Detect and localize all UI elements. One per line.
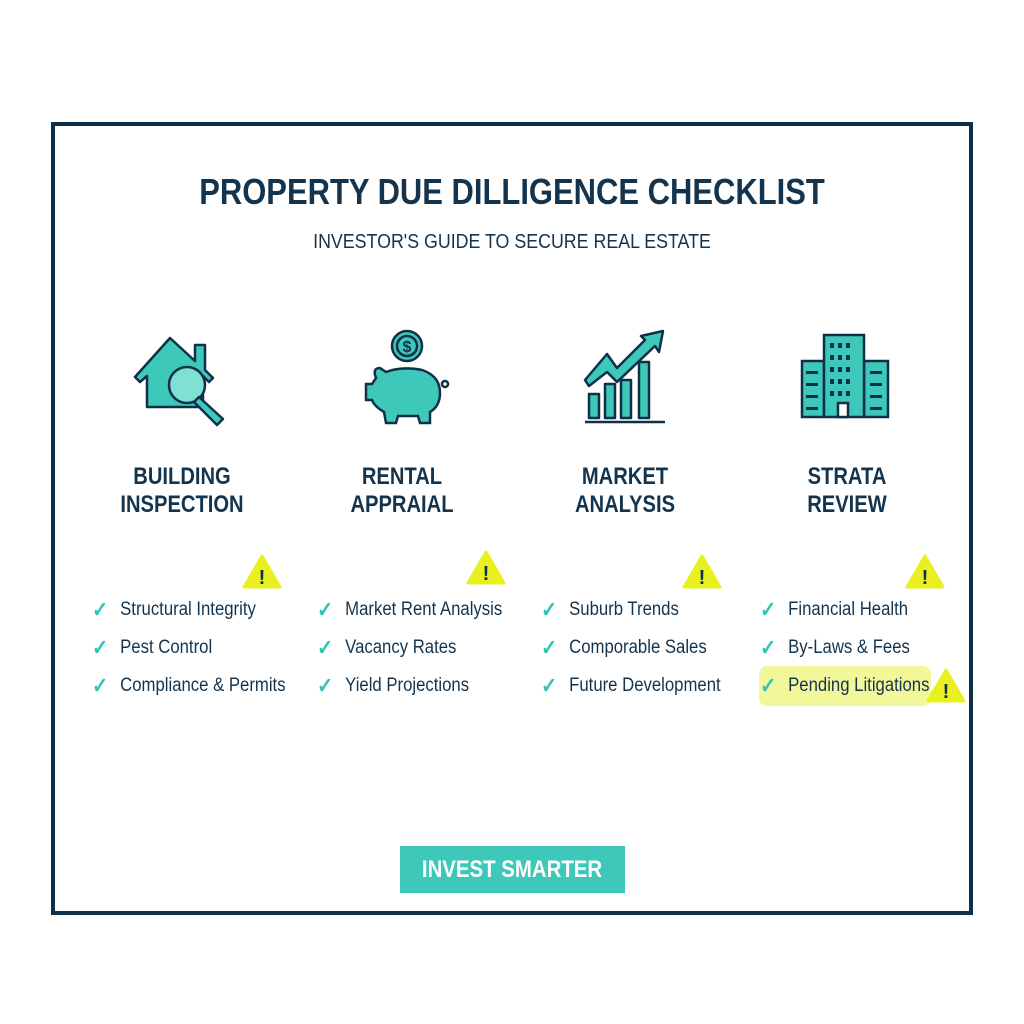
list: strata review: By-Laws & Fees — [788, 637, 910, 658]
list: rental appraisal — [320, 599, 502, 696]
button — [400, 846, 625, 893]
list: strata review — [762, 599, 929, 696]
heading: building inspection — [120, 463, 244, 518]
heading: strata review — [807, 463, 887, 518]
heading: rental appraisal — [350, 463, 454, 518]
list: rental appraisal: Vacancy Rates — [345, 637, 456, 658]
list: market analysis: Future Development — [569, 675, 721, 696]
heading: strata review: STRATA — [808, 463, 886, 490]
warning icons: ! — [699, 567, 705, 589]
list: rental appraisal: Yield Projections — [345, 675, 469, 696]
title: PROPERTY DUE DILLIGENCE CHECKLIST — [199, 171, 825, 212]
heading: building inspection: INSPECTION — [120, 491, 244, 518]
subtitle: INVESTOR'S GUIDE TO SECURE REAL ESTATE — [313, 231, 711, 253]
heading: rental appraisal: RENTAL — [362, 463, 442, 490]
list: market analysis — [544, 599, 721, 696]
button: INVEST SMARTER — [422, 856, 603, 883]
icon: building — [800, 334, 890, 418]
icon: growth chart — [584, 330, 665, 424]
heading: building inspection: BUILDING — [133, 463, 231, 490]
icon: piggy bank: $ — [403, 339, 412, 356]
list: rental appraisal: Market Rent Analysis — [345, 599, 502, 620]
list: strata review: Financial Health — [788, 599, 908, 620]
heading: market analysis — [575, 463, 675, 518]
list: strata review: Pending Litigations — [788, 675, 929, 696]
heading: market analysis: MARKET — [582, 463, 668, 490]
list: market analysis: Comporable Sales — [569, 637, 707, 658]
icon: house with magnifier — [134, 336, 224, 426]
list: building inspection — [94, 599, 286, 696]
frame — [51, 122, 973, 915]
highlight: pending litigations — [759, 666, 931, 706]
icon: piggy bank — [364, 330, 450, 424]
list: building inspection: Compliance & Permits — [120, 675, 286, 696]
heading: strata review: REVIEW — [807, 491, 887, 518]
warning icons: ! — [483, 563, 489, 585]
warning icons: ! — [943, 681, 949, 703]
heading: rental appraisal: APPRAIAL — [350, 491, 454, 518]
heading: market analysis: ANALYSIS — [575, 491, 675, 518]
warning icons: ! — [922, 567, 928, 589]
list: building inspection: Structural Integrity — [120, 599, 256, 620]
list: market analysis: Suburb Trends — [569, 599, 679, 620]
list: building inspection: Pest Control — [120, 637, 212, 658]
warning icons: ! — [259, 567, 265, 589]
